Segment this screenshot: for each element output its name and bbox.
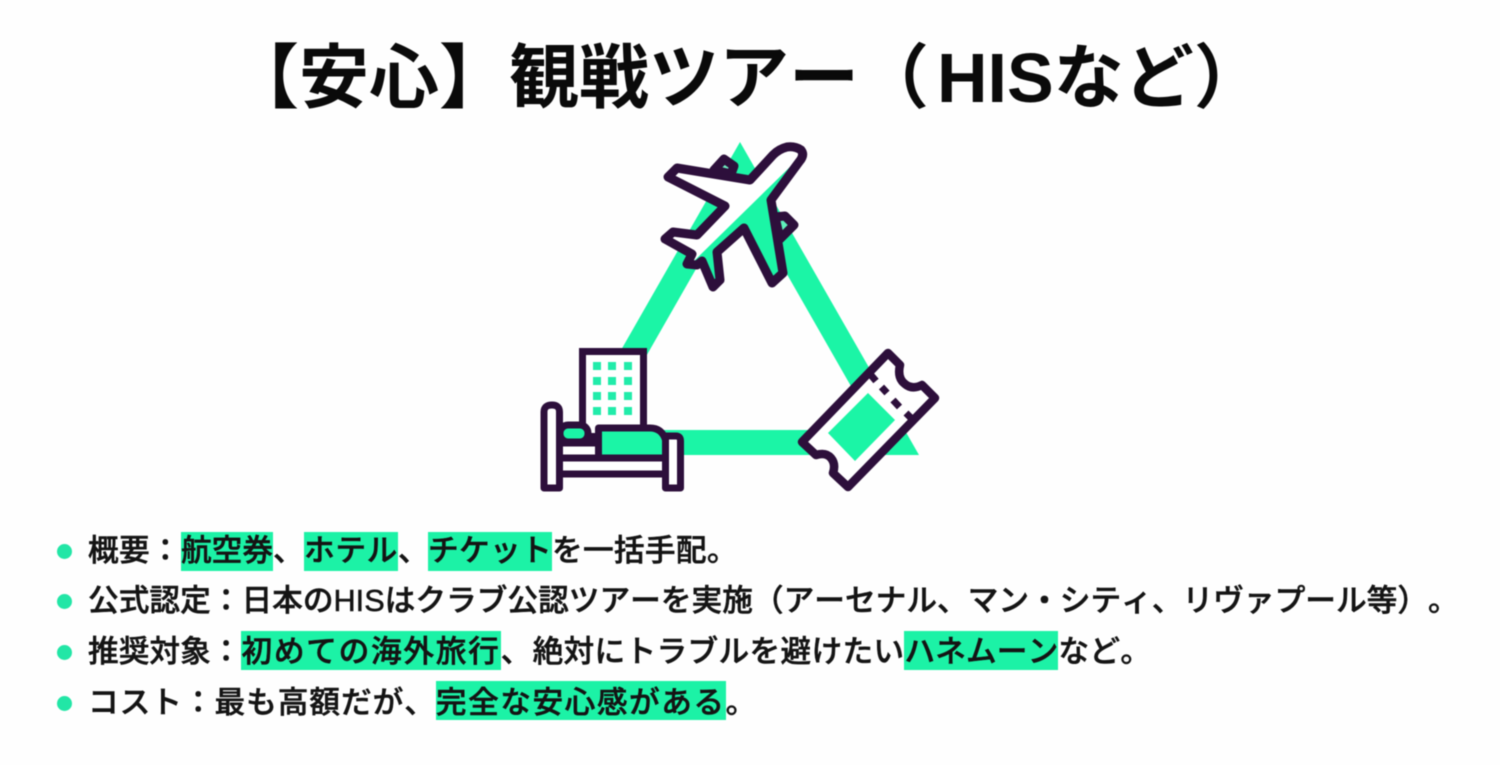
bullet: recommended audience: 推奨対象： 、絶対にトラブルを避けたい など。 <box>88 634 1151 669</box>
blanket <box>598 428 666 458</box>
bed headboard <box>544 405 560 488</box>
bullet: official certification: 公式認定：日本のHISはクラブ公認ツアーを実施（アーセナル、マン・シティ、リヴァプール等）。 <box>88 583 1459 618</box>
bullet: recommended audience: ハネムーン <box>904 634 1058 669</box>
bed rails <box>560 458 666 474</box>
bullet: cost: コスト：最も高額だが、 。 <box>88 685 756 720</box>
bed footboard <box>666 436 680 488</box>
bullet: overview: ホテル <box>304 533 398 568</box>
bullet: recommended audience: 初めての海外旅行 <box>241 634 501 669</box>
icon: ticket <box>802 353 935 487</box>
green triangle <box>561 142 919 455</box>
plane outline <box>665 147 803 287</box>
bullet: overview: 概要： 、 、 を一括手配。 <box>88 533 738 568</box>
title: 【安心】観戦ツアー（HISなど） <box>229 39 1264 117</box>
bullet list <box>56 531 1459 721</box>
pillow <box>560 425 588 442</box>
central diagram <box>540 141 940 492</box>
ticket body <box>802 353 935 487</box>
bullet: cost: 完全な安心感がある <box>436 685 726 720</box>
bed mattress <box>560 443 600 458</box>
plane green shade <box>694 167 790 280</box>
plane body <box>665 147 803 287</box>
icon: hotel and bed <box>544 352 680 488</box>
hotel building <box>582 352 644 436</box>
icon: airplane <box>665 147 820 300</box>
ticket perforation <box>870 374 913 420</box>
bullet: overview: チケット <box>428 533 552 568</box>
hotel windows <box>593 362 632 415</box>
ticket panel <box>828 393 895 461</box>
plane engines <box>714 159 794 239</box>
bullet: overview: 航空券 <box>181 533 273 568</box>
